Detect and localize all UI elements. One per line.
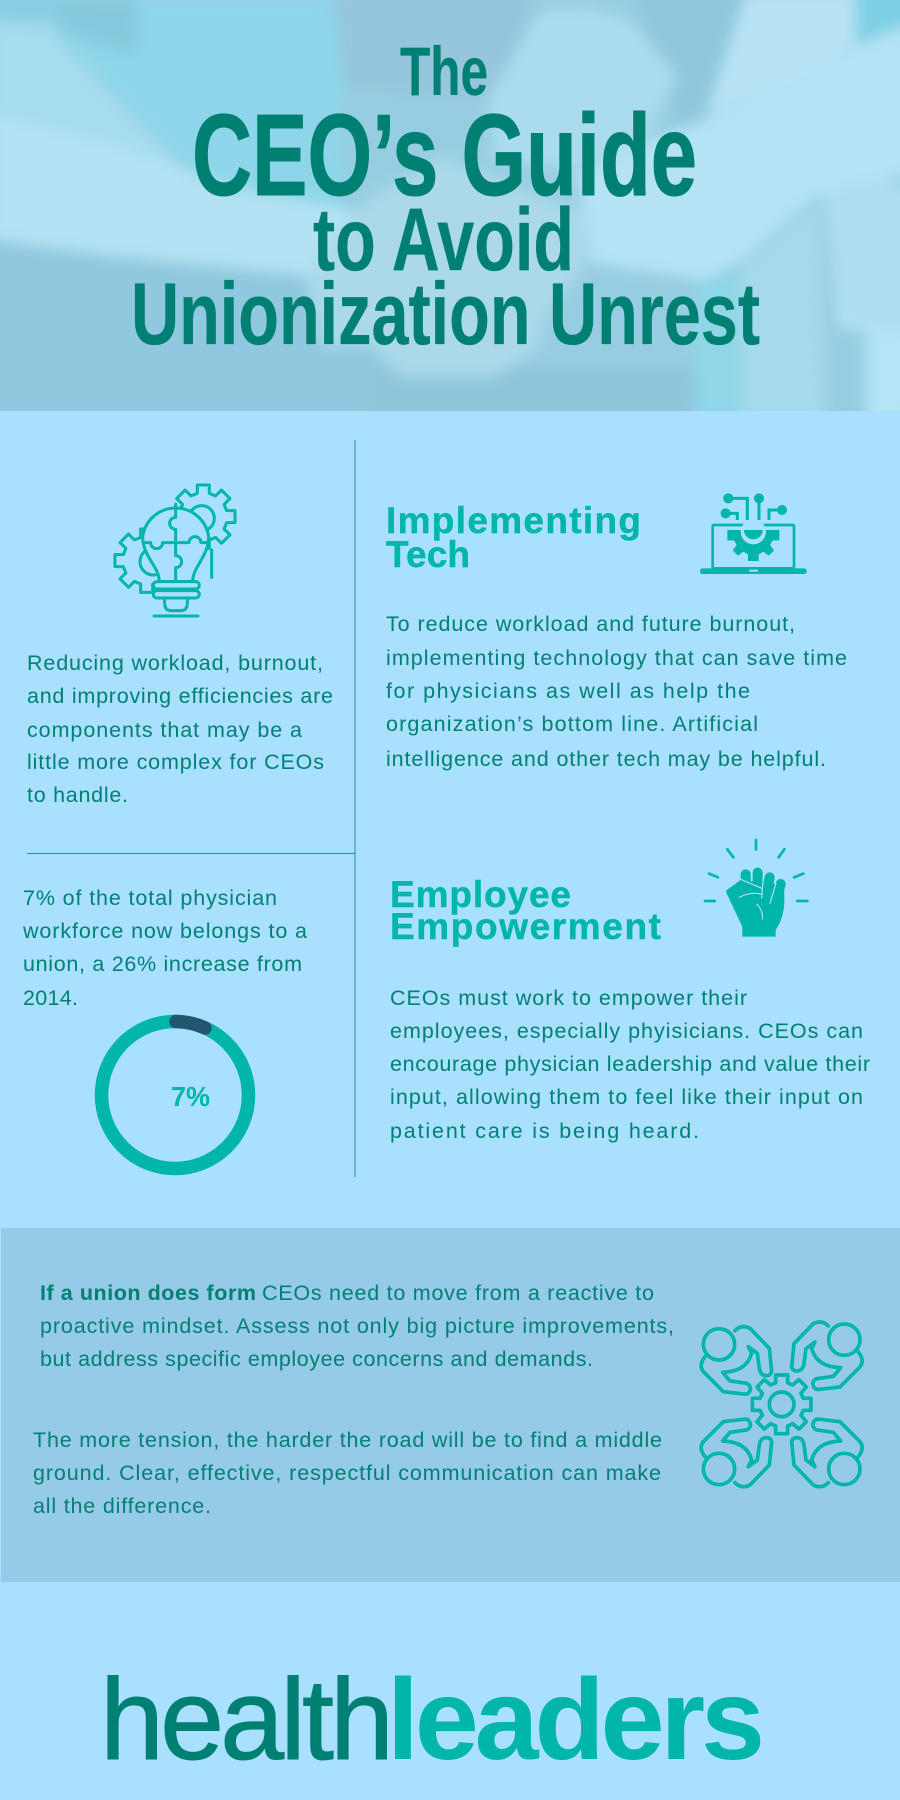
icon: laptop with gear <box>700 493 807 574</box>
text: intro paragraph: and improving efficiencies are <box>27 684 333 708</box>
vertical divider <box>354 440 356 1177</box>
text: union statistic: union, a 26% increase from <box>23 952 302 976</box>
heading: implementing tech: Tech <box>386 534 470 575</box>
text: proactive mindset: but address specific employee concerns and demands. <box>40 1347 593 1371</box>
text: intro paragraph: components that may be a <box>27 718 302 742</box>
text: intro paragraph: Reducing workload, burnout, <box>27 651 323 675</box>
text: employee empowerment paragraph: employees, especially phyisicians. CEOs can <box>390 1019 863 1043</box>
text: intro paragraph <box>27 651 333 807</box>
donut chart: 7%: 7% <box>171 1081 210 1112</box>
text: communication <box>33 1428 662 1518</box>
logo: healthleaders: leaders <box>387 1656 765 1784</box>
text: union statistic: workforce now belongs to a <box>22 919 307 943</box>
panel: if a union does form <box>1 1228 900 1582</box>
horizontal divider <box>27 852 355 854</box>
text: proactive mindset: CEOs need to move from a reactive to <box>262 1281 654 1305</box>
heading: employee empowerment: Empowerment <box>390 906 661 947</box>
text: union statistic: 7% of the total physician <box>23 886 277 910</box>
icon: team around a gear <box>701 1322 862 1487</box>
text: proactive mindset: If a union does form <box>40 1281 256 1305</box>
title: to Avoid <box>313 189 574 289</box>
text: union statistic: 2014. <box>23 986 78 1010</box>
heading: implementing tech <box>386 500 641 575</box>
icon: light bulb with puzzle and gears <box>115 485 235 616</box>
text: communication: all the difference. <box>33 1494 211 1518</box>
text: intro paragraph: to handle. <box>27 783 128 807</box>
text: implementing tech paragraph: for physicians as well as help the <box>386 679 750 703</box>
text: implementing tech paragraph <box>386 612 847 771</box>
text: employee empowerment paragraph: patient care is being heard. <box>390 1119 699 1143</box>
text: implementing tech paragraph: organization’s bottom line. Artificial <box>386 712 758 736</box>
text: employee empowerment paragraph: input, allowing them to feel like their input on <box>390 1085 863 1109</box>
text: employee empowerment paragraph: encourage physician leadership and value their <box>390 1052 870 1076</box>
text: employee empowerment paragraph <box>390 986 870 1143</box>
text: communication: The more tension, the harder the road will be to find a middle <box>33 1428 662 1452</box>
donut chart: 7% <box>102 1022 248 1168</box>
logo: healthleaders <box>100 1656 765 1784</box>
title: The <box>400 33 488 110</box>
logo: healthleaders: health <box>100 1656 394 1784</box>
text: proactive mindset <box>40 1281 674 1371</box>
text: intro paragraph: little more complex for CEOs <box>27 750 324 774</box>
text: proactive mindset: proactive mindset. Assess not only big picture improvements, <box>40 1314 674 1338</box>
text: implementing tech paragraph: implementing technology that can save time <box>386 646 847 670</box>
heading: implementing tech: Implementing <box>386 500 641 541</box>
heading: employee empowerment: Employee <box>390 874 571 915</box>
title: CEO’s Guide <box>192 90 697 220</box>
title <box>131 33 760 363</box>
text: communication: ground. Clear, effective, respectful communication can make <box>33 1461 661 1485</box>
text: implementing tech paragraph: intelligence and other tech may be helpful. <box>386 747 826 771</box>
text: union statistic <box>22 886 307 1010</box>
heading: employee empowerment <box>390 874 661 947</box>
header photo background <box>0 0 900 420</box>
text: employee empowerment paragraph: CEOs must work to empower their <box>390 986 747 1010</box>
icon: raised fist <box>705 840 807 937</box>
text: implementing tech paragraph: To reduce workload and future burnout, <box>386 612 795 636</box>
